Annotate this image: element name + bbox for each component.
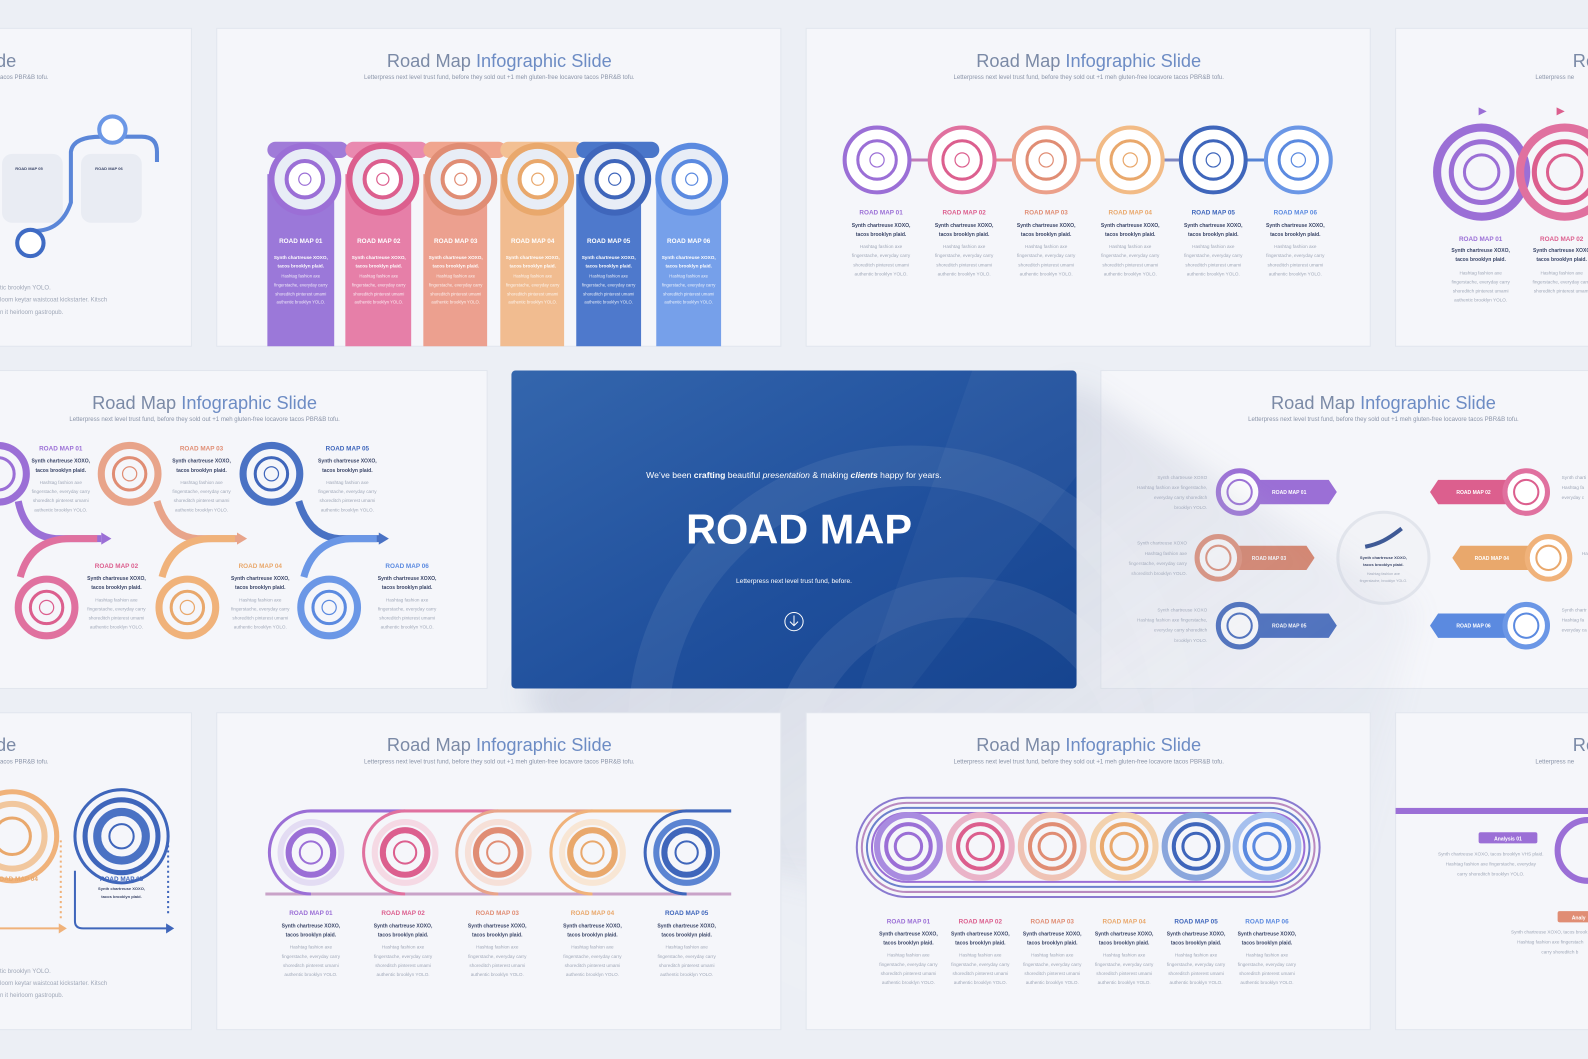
- slide: middle-left spiral roadmap: ROAD MAP 03: [180, 446, 224, 453]
- slide: bottom spiral roadmap: fingerstache, everyday carry: [563, 954, 622, 959]
- slide: middle-left spiral roadmap: fingerstache, everyday carry: [172, 489, 231, 494]
- slide: middle-right arrow banners roadmap: Hashtag fa: [1562, 485, 1585, 490]
- slide: vertical bars roadmap: tacos brooklyn plaid.: [433, 263, 479, 268]
- slide: connected circles roadmap: Synth chartreuse XOXO,: [1017, 223, 1076, 229]
- slide: vertical bars roadmap: Hashtag fashion axe: [589, 273, 629, 278]
- slide: middle-left spiral roadmap: Synth chartreuse XOXO,: [31, 459, 91, 465]
- slide: top-left partial: ROAD MAP 05: [15, 166, 44, 171]
- slide: middle-right arrow banners roadmap: everyday carry shoreditch: [1154, 628, 1208, 633]
- slide: bottom spiral roadmap: Hashtag fashion axe: [476, 945, 519, 950]
- slide: bottom-right partial analysis: Analysis 01: [1494, 836, 1522, 842]
- slide: middle-right arrow banners roadmap: everyday carry shoreditch: [1154, 495, 1208, 500]
- slide: bottom spiral roadmap: ROAD MAP 02: [381, 910, 425, 917]
- slide: middle-right arrow banners roadmap: ROAD MAP 06: [1456, 624, 1491, 630]
- slide: bottom-right partial analysis: Analy: [1572, 915, 1586, 921]
- slide: vertical bars roadmap: shoreditch pinterest umami: [507, 292, 558, 297]
- slide: middle-left spiral roadmap: ROAD MAP 05: [326, 446, 370, 453]
- slide: vertical bars roadmap: fingerstache, everyday carry: [662, 283, 716, 288]
- slide: middle-right arrow banners roadmap: Hashtag fashion axe fingerstache,: [1137, 618, 1207, 623]
- slide: bottom racetrack roadmap: shoreditch pinterest umami: [1024, 971, 1080, 976]
- slide: middle-left spiral roadmap: fingerstache, everyday carry: [87, 606, 146, 611]
- slide: bottom spiral roadmap: authentic brooklyn YOLO.: [471, 972, 524, 977]
- slide: middle-right arrow banners roadmap: Synth chartreuse XOXO: [1157, 608, 1208, 613]
- slide: bottom racetrack roadmap: ROAD MAP 04: [1102, 918, 1146, 925]
- slide: bottom-left partial: [0, 713, 191, 1030]
- slide: bottom spiral roadmap: authentic brooklyn YOLO.: [377, 972, 430, 977]
- slide: bottom racetrack roadmap: shoreditch pinterest umami: [881, 971, 936, 976]
- slide: top-left partial: acos PBR&B tofu.: [0, 75, 49, 81]
- slide: bottom-right partial analysis: Hashtag fashion axe fingerstache, everyday: [1446, 862, 1537, 867]
- slide: connected circles roadmap: fingerstache, everyday carry: [1184, 253, 1243, 258]
- slide: connected circles roadmap: fingerstache, everyday carry: [935, 253, 994, 258]
- slide: middle-left spiral roadmap: tacos brooklyn plaid.: [235, 585, 286, 591]
- slide: connected circles roadmap: ROAD MAP 01: [859, 210, 903, 217]
- slide: bottom spiral roadmap: shoreditch pinterest umami: [283, 963, 339, 968]
- slide: top-right partial targets: tacos brooklyn plaid.: [1455, 257, 1506, 263]
- icon: download arrow: [785, 613, 803, 631]
- slide: bottom spiral roadmap: Letterpress next level trust fund, before they sold out +1 meh gluten-free locavore tacos PBR&B tofu.: [364, 759, 635, 765]
- slide: bottom spiral roadmap: shoreditch pinterest umami: [565, 963, 620, 968]
- slide: bottom racetrack roadmap: Hashtag fashion axe: [1103, 953, 1146, 958]
- slide: bottom racetrack roadmap: Hashtag fashion axe: [1246, 953, 1289, 958]
- slide: connected circles roadmap: authentic brooklyn YOLO.: [938, 271, 991, 276]
- slide: bottom spiral roadmap: Hashtag fashion axe: [290, 945, 332, 950]
- slide: top-left partial: [0, 28, 191, 346]
- slide: connected circles roadmap: tacos brooklyn plaid.: [1188, 232, 1239, 238]
- slide: connected circles roadmap: fingerstache, everyday carry: [1101, 253, 1160, 258]
- slide: middle-left spiral roadmap: shoreditch pinterest umami: [379, 616, 435, 621]
- slide: bottom-left partial: loom keytar waistcoat kickstarter. Kitsch: [0, 981, 107, 987]
- slide: vertical bars roadmap: Hashtag fashion axe: [359, 273, 399, 278]
- slide: connected circles roadmap: shoreditch pinterest umami: [1102, 262, 1158, 267]
- slide: connected circles roadmap: Hashtag fashion axe: [860, 244, 903, 249]
- slide: middle-left spiral roadmap: ROAD MAP 04: [239, 563, 282, 570]
- slide: middle-left spiral roadmap: tacos brooklyn plaid.: [36, 468, 87, 474]
- slide: bottom-right partial analysis: Synth chartreuse XOXO, tacos brook: [1511, 929, 1588, 934]
- slide: bottom spiral roadmap: Synth chartreuse XOXO,: [563, 923, 622, 929]
- slide: vertical bars roadmap: Synth chartreuse XOXO,: [274, 255, 328, 260]
- slide: bottom spiral roadmap: Synth chartreuse XOXO,: [282, 923, 341, 929]
- slide: middle-left spiral roadmap: Hashtag fashion axe: [326, 480, 369, 485]
- slide: bottom racetrack roadmap: Synth chartreuse XOXO,: [951, 931, 1010, 937]
- slide: middle-right arrow banners roadmap: everyday ca: [1562, 628, 1587, 633]
- slide: connected circles roadmap: ROAD MAP 02: [942, 210, 986, 217]
- slide: bottom racetrack roadmap: Hashtag fashion axe: [1031, 953, 1074, 958]
- slide: bottom racetrack roadmap: fingerstache, everyday carry: [1238, 962, 1297, 967]
- shadow of title slide: [522, 385, 1418, 1012]
- slide: vertical bars roadmap: tacos brooklyn plaid.: [356, 263, 402, 268]
- slide: middle-left spiral roadmap: authentic brooklyn YOLO.: [90, 625, 143, 630]
- slide: bottom spiral roadmap: tacos brooklyn plaid.: [661, 932, 712, 938]
- slide: connected circles roadmap: Road Map Infographic Slide: [976, 51, 1201, 71]
- slide: middle-right arrow banners roadmap: ROAD MAP 04: [1475, 556, 1509, 562]
- slide: vertical bars roadmap: tacos brooklyn plaid.: [665, 263, 712, 268]
- slide: vertical bars roadmap: Hashtag fashion axe: [436, 273, 476, 278]
- slide: connected circles roadmap: authentic brooklyn YOLO.: [1187, 271, 1240, 276]
- slide: vertical bars roadmap: authentic brooklyn YOLO.: [276, 300, 325, 305]
- slide: vertical bars roadmap: shoreditch pinterest umami: [353, 292, 404, 297]
- slide: middle-right arrow banners roadmap: [1101, 371, 1588, 688]
- slide: connected circles roadmap: fingerstache, everyday carry: [1017, 253, 1076, 258]
- slide: middle-right arrow banners roadmap: ROAD MAP 01: [1272, 490, 1307, 496]
- slide: middle-left spiral roadmap: Road Map Infographic Slide: [92, 393, 317, 413]
- slide: connected circles roadmap: authentic brooklyn YOLO.: [1269, 271, 1322, 276]
- slide: middle-left spiral roadmap: Hashtag fashion axe: [386, 597, 429, 602]
- slide: middle-right arrow banners roadmap: shoreditch brooklyn YOLO.: [1131, 571, 1187, 576]
- slide: connected circles roadmap: Synth chartreuse XOXO,: [1101, 223, 1160, 229]
- slide: vertical bars roadmap: Letterpress next level trust fund, before they sold out +1 meh gluten-free locavore tacos PBR&B tofu.: [364, 75, 635, 81]
- slide: top-right partial targets: Hashtag fashion axe: [1541, 270, 1583, 275]
- slide: middle-left spiral roadmap: fingerstache, everyday carry: [32, 489, 91, 494]
- slide: middle-left spiral roadmap: tacos brooklyn plaid.: [322, 468, 373, 474]
- slide: bottom spiral roadmap: fingerstache, everyday carry: [468, 954, 527, 959]
- slide: top-left partial: ROAD MAP 06: [95, 166, 124, 171]
- slide: bottom racetrack roadmap: fingerstache, everyday carry: [1095, 962, 1154, 967]
- slide: middle-left spiral roadmap: Hashtag fashion axe: [95, 597, 138, 602]
- slide: connected circles roadmap: ROAD MAP 05: [1192, 210, 1235, 217]
- slide: vertical bars roadmap: tacos brooklyn plaid.: [509, 263, 556, 268]
- slide: bottom racetrack roadmap: ROAD MAP 05: [1174, 918, 1218, 925]
- slide: middle-right arrow banners roadmap: fingerstache, everyday carry: [1129, 561, 1188, 566]
- slide: bottom spiral roadmap: shoreditch pinterest umami: [469, 963, 525, 968]
- slide: vertical bars roadmap: Road Map Infographic Slide: [387, 51, 612, 71]
- slide: bottom racetrack roadmap: Hashtag fashion axe: [959, 953, 1002, 958]
- slide: bottom spiral roadmap: fingerstache, everyday carry: [282, 954, 341, 959]
- slide: middle-left spiral roadmap: Hashtag fashion axe: [40, 480, 82, 485]
- slide: bottom racetrack roadmap: tacos brooklyn plaid.: [955, 941, 1006, 947]
- slide: middle-left spiral roadmap: [0, 371, 487, 688]
- slide: vertical bars roadmap: ROAD MAP 06: [667, 238, 711, 245]
- slide: bottom spiral roadmap: tacos brooklyn plaid.: [378, 932, 429, 938]
- slide: middle-left spiral roadmap: authentic brooklyn YOLO.: [381, 625, 434, 630]
- slide: connected circles roadmap: Synth chartreuse XOXO,: [1184, 223, 1243, 229]
- slide: bottom racetrack roadmap: [806, 713, 1370, 1030]
- slide: bottom racetrack roadmap: ROAD MAP 06: [1245, 918, 1289, 925]
- slide: vertical bars roadmap: authentic brooklyn YOLO.: [664, 300, 713, 305]
- slide: bottom racetrack roadmap: fingerstache, everyday carry: [1023, 962, 1082, 967]
- slide: connected circles roadmap: authentic brooklyn YOLO.: [1104, 271, 1157, 276]
- slide: top-right partial targets: ROAD MAP 02: [1540, 236, 1584, 243]
- slide: middle-right arrow banners roadmap: Hashtag fashion axe: [1367, 572, 1400, 576]
- slide: bottom spiral roadmap: Hashtag fashion axe: [382, 945, 425, 950]
- slide: middle-left spiral roadmap: tacos brooklyn plaid.: [176, 468, 227, 474]
- slide: middle-right arrow banners roadmap: Hashtag fashion axe: [1145, 551, 1187, 556]
- slide: middle-right arrow banners roadmap: tacos brooklyn plaid.: [1363, 562, 1404, 567]
- slide: vertical bars roadmap: ROAD MAP 02: [357, 238, 401, 245]
- slide: middle-left spiral roadmap: authentic brooklyn YOLO.: [234, 625, 287, 630]
- slide: bottom racetrack roadmap: Hashtag fashion axe: [887, 953, 930, 958]
- slide: vertical bars roadmap: Synth chartreuse XOXO,: [506, 255, 560, 260]
- slide: middle-right arrow banners roadmap: Synth charti: [1562, 475, 1586, 480]
- slide: bottom spiral roadmap: ROAD MAP 03: [476, 910, 519, 917]
- slide: bottom spiral roadmap: authentic brooklyn YOLO.: [566, 972, 619, 977]
- slide: connected circles roadmap: Hashtag fashion axe: [1109, 244, 1152, 249]
- slide: bottom spiral roadmap: tacos brooklyn plaid.: [286, 932, 337, 938]
- slide: vertical bars roadmap: authentic brooklyn YOLO.: [584, 300, 633, 305]
- slide: bottom spiral roadmap: Synth chartreuse XOXO,: [468, 923, 527, 929]
- slide: bottom-right partial analysis: Hashtag fashion axe fingerstach: [1517, 940, 1584, 945]
- slide: bottom spiral roadmap: shoreditch pinterest umami: [659, 963, 715, 968]
- slide: top-right partial targets: shoreditch pinterest umami: [1453, 289, 1509, 294]
- slide: vertical bars roadmap: fingerstache, everyday carry: [429, 283, 483, 288]
- slide: top-right partial targets: [1396, 28, 1588, 346]
- slide: top-right partial targets: ROAD MAP 01: [1459, 236, 1503, 243]
- slide: middle-right arrow banners roadmap: Hashtag fa: [1562, 618, 1585, 623]
- slide: vertical bars roadmap: tacos brooklyn plaid.: [278, 263, 324, 268]
- slide: bottom racetrack roadmap: tacos brooklyn plaid.: [1027, 941, 1078, 947]
- slide: bottom spiral roadmap: Road Map Infographic Slide: [387, 735, 612, 755]
- slide: middle-left spiral roadmap: shoreditch pinterest umami: [89, 616, 144, 621]
- slide: bottom-right partial analysis: [1396, 713, 1588, 1030]
- slide: bottom-left partial: acos PBR&B tofu.: [0, 759, 49, 765]
- slide: bottom spiral roadmap: Synth chartreuse XOXO,: [374, 923, 433, 929]
- slide: center title ROAD MAP: ROAD MAP: [686, 506, 912, 553]
- slide: middle-right arrow banners roadmap: Hashtag fashion axe fingerstache,: [1137, 485, 1207, 490]
- slide: middle-left spiral roadmap: Hashtag fashion axe: [239, 597, 282, 602]
- slide: bottom spiral roadmap: shoreditch pinterest umami: [375, 963, 431, 968]
- slide: vertical bars roadmap: [217, 28, 781, 346]
- slide: bottom racetrack roadmap: authentic brooklyn YOLO.: [882, 980, 935, 985]
- slide: connected circles roadmap: ROAD MAP 06: [1274, 210, 1317, 217]
- slide: bottom-right partial analysis: carry shoreditch b: [1541, 950, 1579, 955]
- slide: bottom racetrack roadmap: shoreditch pinterest umami: [952, 971, 1008, 976]
- slide: vertical bars roadmap: ROAD MAP 04: [511, 238, 555, 245]
- slide: top-left partial: n it heirloom gastropub.: [0, 310, 64, 316]
- slide: bottom racetrack roadmap: authentic brooklyn YOLO.: [1026, 980, 1079, 985]
- slide: middle-right arrow banners roadmap: ROAD MAP 05: [1272, 624, 1307, 630]
- slide: bottom racetrack roadmap: fingerstache, everyday carry: [951, 962, 1010, 967]
- slide: bottom racetrack roadmap: fingerstache, everyday carry: [1167, 962, 1226, 967]
- slide: bottom-right partial analysis: Letterpress ne: [1535, 759, 1575, 765]
- slide: middle-right arrow banners roadmap: Synth chartreuse XOXO,: [1360, 555, 1407, 560]
- slide: bottom racetrack roadmap: Synth chartreuse XOXO,: [1238, 931, 1297, 937]
- slide: top-left partial: tic brooklyn YOLO.: [0, 286, 51, 292]
- slide: vertical bars roadmap: shoreditch pinterest umami: [430, 292, 481, 297]
- slide: connected circles roadmap: ROAD MAP 04: [1109, 210, 1152, 217]
- slide: bottom-right partial analysis: carry shoreditch brooklyn YOLO.: [1457, 872, 1524, 877]
- slide: vertical bars roadmap: tacos brooklyn plaid.: [585, 263, 632, 268]
- slide: vertical bars roadmap: authentic brooklyn YOLO.: [354, 300, 403, 305]
- slide: connected circles roadmap: tacos brooklyn plaid.: [1270, 232, 1321, 238]
- slide: bottom-left partial: ROAD MAP 05: [100, 876, 144, 883]
- slide: vertical bars roadmap: Synth chartreuse XOXO,: [582, 255, 636, 260]
- slide: middle-left spiral roadmap: authentic brooklyn YOLO.: [34, 507, 87, 512]
- slide: middle-left spiral roadmap: authentic brooklyn YOLO.: [175, 507, 228, 512]
- slide: bottom-left partial: Synth chartreuse XOXO,: [98, 886, 145, 891]
- slide: bottom racetrack roadmap: Synth chartreuse XOXO,: [1095, 931, 1154, 937]
- slide: center title ROAD MAP: We’ve been crafting beautiful presentation & making clients happy for years.: [646, 470, 942, 480]
- slide: bottom racetrack roadmap: tacos brooklyn plaid.: [1242, 941, 1293, 947]
- slide: bottom spiral roadmap: [217, 713, 781, 1030]
- slide: vertical bars roadmap: Synth chartreuse XOXO,: [662, 255, 716, 260]
- slide: bottom racetrack roadmap: Letterpress next level trust fund, before they sold out +1 meh gluten-free locavore tacos PBR&B tofu.: [953, 759, 1224, 765]
- slide: bottom racetrack roadmap: ROAD MAP 01: [887, 918, 931, 925]
- slide: center title ROAD MAP: Letterpress next level trust fund, before.: [736, 578, 852, 585]
- slide: bottom-left partial: tacos brooklyn plaid.: [101, 894, 142, 899]
- slide: middle-right arrow banners roadmap: Synth chartreuse XOXO: [1137, 541, 1187, 546]
- slide: connected circles roadmap: ROAD MAP 03: [1024, 210, 1068, 217]
- slide: connected circles roadmap: shoreditch pinterest umami: [1185, 262, 1241, 267]
- slide: vertical bars roadmap: shoreditch pinterest umami: [663, 292, 714, 297]
- slide: middle-right arrow banners roadmap: Ha: [1582, 551, 1588, 556]
- slide: bottom spiral roadmap: fingerstache, everyday carry: [374, 954, 433, 959]
- slide: bottom racetrack roadmap: Synth chartreuse XOXO,: [1023, 931, 1082, 937]
- slide: middle-left spiral roadmap: tacos brooklyn plaid.: [382, 585, 433, 591]
- slide: middle-left spiral roadmap: Letterpress next level trust fund, before they sold out +1 meh gluten-free locavore tacos PBR&B tofu.: [69, 417, 340, 423]
- slide: connected circles roadmap: Letterpress next level trust fund, before they sold out +1 meh gluten-free locavore tacos PBR&B tofu.: [953, 75, 1224, 81]
- slide: connected circles roadmap: authentic brooklyn YOLO.: [855, 271, 908, 276]
- slide: vertical bars roadmap: authentic brooklyn YOLO.: [431, 300, 480, 305]
- slide: bottom spiral roadmap: Hashtag fashion axe: [571, 945, 614, 950]
- slide: bottom spiral roadmap: tacos brooklyn plaid.: [472, 932, 523, 938]
- slide: middle-left spiral roadmap: ROAD MAP 06: [385, 563, 429, 570]
- slide: middle-right arrow banners roadmap: Synth chartr: [1562, 608, 1587, 613]
- slide: middle-left spiral roadmap: fingerstache, everyday carry: [378, 606, 437, 611]
- slide: middle-left spiral roadmap: authentic brooklyn YOLO.: [321, 507, 374, 512]
- slide: bottom racetrack roadmap: authentic brooklyn YOLO.: [1240, 980, 1293, 985]
- slide: vertical bars roadmap: Hashtag fashion axe: [669, 273, 709, 278]
- slide: vertical bars roadmap: Hashtag fashion axe: [281, 273, 321, 278]
- slide: connected circles roadmap: Synth chartreuse XOXO,: [852, 223, 911, 229]
- slide: vertical bars roadmap: fingerstache, everyday carry: [352, 283, 406, 288]
- slide: bottom spiral roadmap: authentic brooklyn YOLO.: [284, 972, 337, 977]
- slide: vertical bars roadmap: Synth chartreuse XOXO,: [352, 255, 406, 260]
- slide: bottom racetrack roadmap: tacos brooklyn plaid.: [1171, 941, 1222, 947]
- slide: bottom racetrack roadmap: shoreditch pinterest umami: [1239, 971, 1295, 976]
- slide: bottom spiral roadmap: authentic brooklyn YOLO.: [660, 972, 713, 977]
- slide: middle-left spiral roadmap: shoreditch pinterest umami: [232, 616, 288, 621]
- slide: bottom racetrack roadmap: tacos brooklyn plaid.: [1099, 941, 1150, 947]
- slide: middle-left spiral roadmap: Synth chartreuse XOXO,: [87, 576, 146, 582]
- slide: middle-right arrow banners roadmap: Letterpress next level trust fund, before they sold out +1 meh gluten-free locavore tacos PBR&B tofu.: [1248, 417, 1519, 423]
- slide: top-right partial targets: Synth chartreuse XOXO,: [1451, 248, 1511, 254]
- slide: bottom racetrack roadmap: authentic brooklyn YOLO.: [954, 980, 1007, 985]
- slide: top-right partial targets: Letterpress ne: [1535, 75, 1575, 81]
- slide: middle-right arrow banners roadmap: Synth chartreuse XOXO: [1157, 475, 1208, 480]
- slide: top-left partial: loom keytar waistcoat kickstarter. Kitsch: [0, 298, 107, 304]
- slide: middle-left spiral roadmap: shoreditch pinterest umami: [174, 498, 229, 503]
- slide: bottom-left partial: tic brooklyn YOLO.: [0, 969, 51, 975]
- slide: middle-right arrow banners roadmap: ROAD MAP 02: [1456, 490, 1491, 496]
- slide: middle-right arrow banners roadmap: everyday c: [1562, 495, 1585, 500]
- slide: connected circles roadmap: shoreditch pinterest umami: [853, 262, 909, 267]
- slide: connected circles roadmap: Hashtag fashion axe: [1274, 244, 1317, 249]
- slide: middle-left spiral roadmap: Synth chartreuse XOXO,: [231, 576, 290, 582]
- slide: bottom spiral roadmap: ROAD MAP 04: [571, 910, 615, 917]
- slide: connected circles roadmap: authentic brooklyn YOLO.: [1020, 271, 1073, 276]
- slide: middle-left spiral roadmap: tacos brooklyn plaid.: [91, 585, 142, 591]
- slide: vertical bars roadmap: Synth chartreuse XOXO,: [429, 255, 483, 260]
- slide: connected circles roadmap: shoreditch pinterest umami: [1267, 262, 1323, 267]
- slide: vertical bars roadmap: authentic brooklyn YOLO.: [508, 300, 557, 305]
- slide: top-right partial targets: authentic brooklyn YOLO.: [1454, 298, 1507, 303]
- slide: vertical bars roadmap: fingerstache, everyday carry: [506, 283, 560, 288]
- slide: connected circles roadmap: Hashtag fashion axe: [1025, 244, 1068, 249]
- slide: bottom racetrack roadmap: shoreditch pinterest umami: [1168, 971, 1224, 976]
- slide: vertical bars roadmap: ROAD MAP 01: [279, 238, 323, 245]
- slide: bottom spiral roadmap: tacos brooklyn plaid.: [567, 932, 618, 938]
- slide: connected circles roadmap: shoreditch pinterest umami: [936, 262, 992, 267]
- slide: bottom racetrack roadmap: authentic brooklyn YOLO.: [1170, 980, 1223, 985]
- slide: connected circles roadmap: [806, 28, 1370, 346]
- slide: bottom racetrack roadmap: authentic brooklyn YOLO.: [1098, 980, 1151, 985]
- slide: middle-left spiral roadmap: ROAD MAP 01: [39, 446, 83, 453]
- slide: bottom racetrack roadmap: Road Map Infographic Slide: [976, 735, 1201, 755]
- slide: middle-left spiral roadmap: fingerstache, everyday carry: [231, 606, 290, 611]
- slide: connected circles roadmap: tacos brooklyn plaid.: [939, 232, 990, 238]
- slide: middle-left spiral roadmap: ROAD MAP 02: [95, 563, 139, 570]
- slide: vertical bars roadmap: ROAD MAP 05: [587, 238, 631, 245]
- slide: middle-left spiral roadmap: Hashtag fashion axe: [180, 480, 223, 485]
- slide: connected circles roadmap: tacos brooklyn plaid.: [1105, 232, 1156, 238]
- slide: connected circles roadmap: shoreditch pinterest umami: [1018, 262, 1074, 267]
- slide: connected circles roadmap: Synth chartreuse XOXO,: [935, 223, 994, 229]
- slide: vertical bars roadmap: ROAD MAP 03: [434, 238, 478, 245]
- slide: bottom spiral roadmap: Synth chartreuse XOXO,: [657, 923, 717, 929]
- slide: bottom-right partial analysis: Synth chartreuse XOXO, tacos brooklyn VHS plaid.: [1438, 852, 1544, 857]
- slide: middle-right arrow banners roadmap: brooklyn YOLO.: [1174, 638, 1207, 643]
- slide: vertical bars roadmap: fingerstache, everyday carry: [582, 283, 636, 288]
- slide: top-right partial targets: Hashtag fashion axe: [1459, 270, 1502, 275]
- slide: bottom racetrack roadmap: shoreditch pinterest umami: [1096, 971, 1152, 976]
- slide: vertical bars roadmap: Hashtag fashion axe: [513, 273, 553, 278]
- slide: connected circles roadmap: Hashtag fashion axe: [1192, 244, 1235, 249]
- slide: bottom racetrack roadmap: ROAD MAP 02: [959, 918, 1002, 925]
- slide: bottom racetrack roadmap: ROAD MAP 03: [1031, 918, 1074, 925]
- slide: connected circles roadmap: fingerstache, everyday carry: [852, 253, 911, 258]
- slide: bottom spiral roadmap: Hashtag fashion axe: [665, 945, 708, 950]
- slide: middle-left spiral roadmap: Synth chartreuse XOXO,: [172, 459, 231, 465]
- slide: middle-right arrow banners roadmap: ROAD MAP 03: [1252, 556, 1286, 562]
- slide: middle-right arrow banners roadmap: Road Map Infographic Slide: [1271, 393, 1496, 413]
- slide: top-right partial targets: shoreditch pinterest umami: [1534, 289, 1588, 294]
- slide: middle-left spiral roadmap: shoreditch pinterest umami: [320, 498, 375, 503]
- slide: bottom racetrack roadmap: Synth chartreuse XOXO,: [1167, 931, 1226, 937]
- slide: middle-left spiral roadmap: fingerstache, everyday carry: [318, 489, 377, 494]
- slide: center title ROAD MAP: [511, 371, 1175, 992]
- slide: middle-left spiral roadmap: shoreditch pinterest umami: [33, 498, 89, 503]
- slide: connected circles roadmap: Hashtag fashion axe: [943, 244, 986, 249]
- slide: connected circles roadmap: Synth chartreuse XOXO,: [1266, 223, 1325, 229]
- slide: bottom racetrack roadmap: Hashtag fashion axe: [1175, 953, 1218, 958]
- slide: middle-left spiral roadmap: Synth chartreuse XOXO,: [378, 576, 437, 582]
- slide: vertical bars roadmap: shoreditch pinterest umami: [275, 292, 326, 297]
- slide: bottom spiral roadmap: ROAD MAP 01: [289, 910, 333, 917]
- slide: vertical bars roadmap: fingerstache, everyday carry: [274, 283, 328, 288]
- slide: bottom-left partial: n it heirloom gastropub.: [0, 993, 64, 999]
- slide: connected circles roadmap: tacos brooklyn plaid.: [1021, 232, 1072, 238]
- slide: middle-left spiral roadmap: Synth chartreuse XOXO,: [318, 459, 377, 465]
- slide: bottom spiral roadmap: ROAD MAP 05: [665, 910, 709, 917]
- slide: bottom racetrack roadmap: fingerstache, everyday carry: [879, 962, 938, 967]
- slide: connected circles roadmap: fingerstache, everyday carry: [1266, 253, 1325, 258]
- slide: bottom spiral roadmap: fingerstache, everyday carry: [657, 954, 716, 959]
- slide: bottom racetrack roadmap: tacos brooklyn plaid.: [883, 941, 934, 947]
- slide: connected circles roadmap: tacos brooklyn plaid.: [856, 232, 907, 238]
- slide: middle-right arrow banners roadmap: brooklyn YOLO.: [1174, 505, 1207, 510]
- slide: top-right partial targets: tacos brooklyn plaid.: [1536, 257, 1588, 263]
- slide: bottom racetrack roadmap: Synth chartreuse XOXO,: [879, 931, 938, 937]
- slide: top-right partial targets: fingerstache, everyday carry: [1451, 279, 1510, 284]
- slide: vertical bars roadmap: shoreditch pinterest umami: [583, 292, 634, 297]
- slide: middle-right arrow banners roadmap: fingerstache, brooklyn YOLO.: [1360, 579, 1407, 583]
